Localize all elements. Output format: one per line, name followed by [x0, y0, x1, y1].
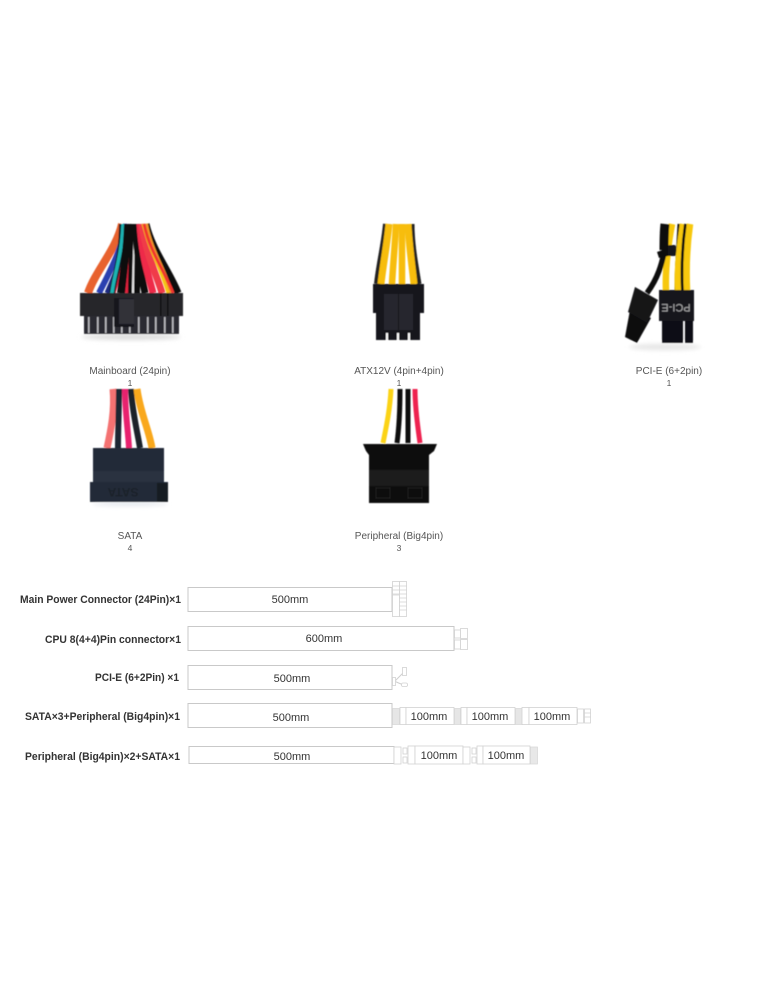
icon: plug 2	[463, 747, 476, 764]
caption: mainboard: Mainboard (24pin)	[89, 366, 171, 377]
label: peripheral and SATA: Peripheral (Big4pin)×2+SATA×1	[25, 751, 180, 763]
segment: 100mm second	[461, 708, 515, 724]
icon: ATX12V connector photo	[373, 224, 424, 340]
icon: SATA connector photo: SATA	[107, 485, 138, 499]
cable length bar: 500mm	[188, 666, 392, 690]
label: CPU: CPU 8(4+4)Pin connector×1	[45, 634, 181, 646]
cable length bar: 600mm	[188, 626, 454, 650]
cable row: main power connector	[20, 582, 407, 616]
icon: PCI-E connector photo	[625, 224, 701, 350]
cable row: CPU connector	[45, 626, 468, 650]
quantity: peripheral: 3	[397, 543, 402, 553]
label: SATA and peripheral: SATA×3+Peripheral (Big4pin)×1	[25, 711, 180, 723]
caption: peripheral: Peripheral (Big4pin)	[355, 531, 443, 542]
cable row: peripheral and SATA	[25, 746, 538, 764]
icon: PCI-E connector photo: PCI-E	[661, 301, 691, 313]
icon: plug 2	[454, 708, 460, 724]
quantity: SATA: 4	[128, 543, 133, 553]
label: PCI-E cable: PCI-E (6+2Pin) ×1	[95, 672, 179, 684]
icon: plug 1	[394, 747, 407, 764]
segment: 100mm first: 100mm	[411, 711, 447, 723]
length text: 500mm	[274, 673, 310, 685]
icon: end plug	[578, 709, 591, 723]
caption: ATX12V: ATX12V (4pin+4pin)	[354, 366, 444, 377]
length text: 500mm	[273, 712, 309, 724]
segment: 100mm first: 100mm	[421, 750, 457, 762]
segment: 100mm second	[477, 746, 530, 764]
cable length bar: 500mm	[189, 746, 394, 764]
icon: end plug	[530, 747, 538, 764]
length text: 500mm	[274, 751, 310, 763]
quantity: ATX12V: 1	[397, 378, 402, 388]
cable length bar: 500mm	[188, 588, 392, 612]
icon: 24pin plug outline	[392, 582, 407, 616]
segment: 100mm third: 100mm	[534, 711, 570, 723]
caption: PCI-E: PCI-E (6+2pin)	[636, 366, 702, 377]
panel: peripheral connector	[355, 389, 443, 553]
panel: mainboard 24pin connector	[80, 224, 183, 388]
icon: plug 3	[516, 708, 522, 724]
segment: 100mm first	[400, 708, 454, 724]
length text: 600mm	[306, 633, 342, 645]
icon: peripheral connector photo	[363, 389, 437, 503]
icon: SATA connector photo	[90, 389, 168, 506]
icon: plug 1	[392, 708, 400, 724]
segment: 100mm third	[522, 708, 577, 724]
icon: mainboard connector photo	[80, 224, 183, 340]
segment: 100mm second: 100mm	[488, 750, 524, 762]
cable row: PCI-E	[95, 666, 408, 690]
segment: 100mm first	[408, 746, 463, 764]
cable length bar: 500mm	[188, 704, 392, 728]
cable row: SATA and peripheral	[25, 704, 591, 728]
quantity: PCI-E: 1	[667, 378, 672, 388]
panel: PCI-E connector	[625, 224, 702, 388]
length text: 500mm	[272, 594, 308, 606]
panel: ATX12V connector	[354, 224, 444, 388]
icon: 8pin plug outline	[454, 628, 468, 650]
icon: PCI-E plug outline	[392, 668, 408, 686]
segment: 100mm second: 100mm	[472, 711, 508, 723]
quantity: mainboard: 1	[128, 378, 133, 388]
panel: SATA connector	[90, 389, 168, 553]
caption: SATA: SATA	[118, 531, 143, 542]
label: main power: Main Power Connector (24Pin)×1	[20, 594, 181, 606]
